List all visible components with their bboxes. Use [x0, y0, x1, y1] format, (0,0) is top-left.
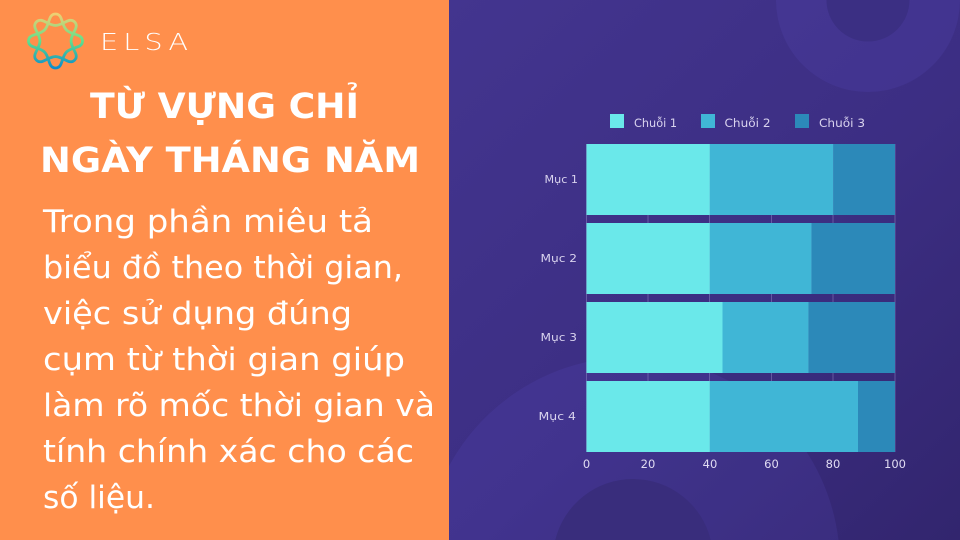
body text: làm rõ mốc thời gian và — [43, 388, 435, 424]
body text: biểu đồ theo thời gian, — [43, 250, 403, 286]
icon: ELSA logo — [28, 14, 82, 68]
category labels: Mục 1 — [544, 173, 578, 186]
value axis: 80 — [826, 457, 840, 471]
legend — [610, 114, 865, 130]
category labels: Mục 3 — [540, 331, 577, 344]
category labels — [538, 173, 578, 423]
panel: purple chart panel — [449, 0, 960, 540]
bar: Mục 4 — [586, 381, 895, 452]
bar: Mục 2 — [586, 223, 895, 294]
title: NGÀY THÁNG NĂM — [40, 138, 420, 181]
body text: cụm từ thời gian giúp — [43, 342, 405, 378]
bar chart — [538, 114, 906, 471]
bar: Mục 3 — [586, 302, 895, 373]
brand name: ELSA — [100, 30, 188, 56]
value axis: 20 — [641, 457, 655, 471]
legend: Chuỗi 3 — [819, 116, 865, 130]
legend: Chuỗi 1 — [634, 116, 677, 130]
value axis: 100 — [884, 457, 906, 471]
value axis: 40 — [703, 457, 717, 471]
title: TỪ VỰNG CHỈ — [90, 81, 359, 127]
body text — [42, 204, 435, 516]
body text: việc sử dụng đúng — [43, 296, 352, 332]
value axis: 60 — [764, 457, 779, 471]
bar: Mục 1 — [586, 144, 895, 215]
body text: số liệu. — [43, 480, 155, 516]
category labels: Mục 2 — [540, 252, 577, 265]
legend: Chuỗi 2 — [724, 116, 770, 130]
body text: Trong phần miêu tả — [42, 204, 373, 240]
category labels: Mục 4 — [538, 410, 576, 423]
body text: tính chính xác cho các — [43, 434, 414, 470]
panel: orange text panel — [0, 0, 449, 540]
value axis — [583, 457, 906, 471]
value axis: 0 — [583, 457, 590, 471]
title — [40, 81, 420, 181]
